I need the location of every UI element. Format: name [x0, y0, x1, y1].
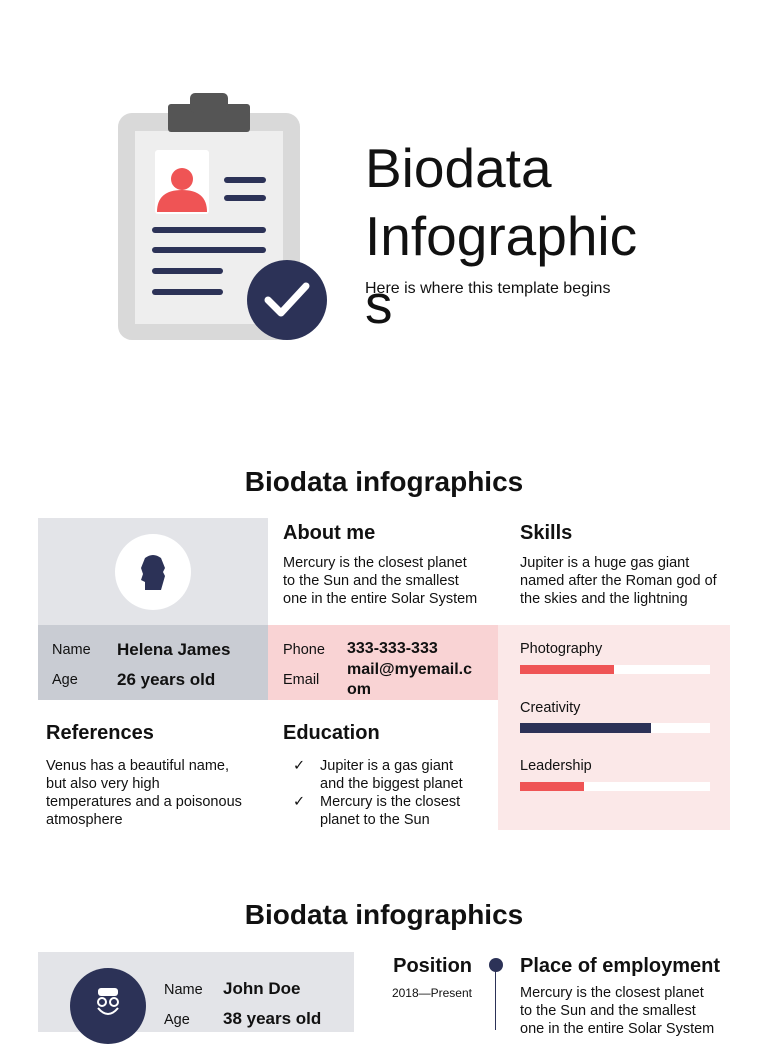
panel: contact: mail@myemail.c	[347, 661, 472, 678]
panel: contact	[268, 625, 498, 700]
heading: section 1: Biodata infographics	[245, 466, 523, 497]
title: Biodata	[365, 137, 552, 199]
panel: contact: om	[347, 681, 371, 698]
title: s	[365, 273, 392, 335]
timeline: Mercury is the closest planet	[520, 985, 704, 1001]
panel: skills text: the skies and the lightning	[520, 591, 688, 607]
timeline: Place of employment	[520, 955, 720, 977]
title	[365, 137, 637, 335]
panel: education: and the biggest planet	[320, 776, 463, 792]
panel: references: temperatures and a poisonous	[46, 794, 242, 810]
panel: profile 2: Name	[164, 982, 203, 998]
panel: name/age: Age	[52, 672, 78, 688]
icon: person avatar	[115, 534, 191, 610]
panel: name/age	[38, 625, 268, 700]
panel: about me: About me	[283, 522, 375, 544]
panel: photo	[38, 518, 268, 625]
timeline: 2018—Present	[392, 986, 472, 1000]
panel: profile 2: 38 years old	[223, 1009, 321, 1028]
subtitle: Here is where this template begins	[365, 280, 610, 297]
panel: education: planet to the Sun	[320, 812, 430, 828]
panel: profile 2: John Doe	[223, 979, 300, 998]
panel: education: ✓	[293, 794, 305, 810]
timeline	[392, 955, 720, 1037]
panel: skills text: Jupiter is a huge gas giant	[520, 555, 689, 571]
panel: references: but also very high	[46, 776, 160, 792]
heading: section 2: Biodata infographics	[245, 899, 523, 930]
panel: about me: one in the entire Solar System	[283, 591, 477, 607]
panel: skill bars	[498, 625, 730, 830]
panel: references: atmosphere	[46, 812, 123, 828]
panel: education: Mercury is the closest	[320, 794, 460, 810]
panel: references: Venus has a beautiful name,	[46, 758, 229, 774]
icon: man avatar	[70, 968, 146, 1044]
panel: skills text: Skills	[520, 522, 572, 544]
panel: education: ✓	[293, 758, 305, 774]
panel: education: Education	[283, 722, 380, 744]
panel: name/age: Helena James	[117, 640, 230, 659]
text: one in the entire Solar System	[520, 1021, 714, 1037]
panel: about me	[283, 522, 477, 607]
text: Leadership	[520, 758, 592, 774]
panel: references	[46, 722, 242, 828]
panel: skills text: named after the Roman god of	[520, 573, 717, 589]
panel: about me: to the Sun and the smallest	[283, 573, 459, 589]
panel: name/age: 26 years old	[117, 670, 215, 689]
text: Creativity	[520, 700, 580, 716]
panel: skills text	[520, 522, 717, 607]
panel: references: References	[46, 722, 154, 744]
icon: clipboard	[118, 93, 327, 340]
panel: education	[283, 722, 463, 828]
title: Infographic	[365, 205, 637, 267]
timeline: Position	[393, 955, 472, 977]
panel: education: Jupiter is a gas giant	[320, 758, 453, 774]
timeline: to the Sun and the smallest	[520, 1003, 696, 1019]
panel: name/age: Name	[52, 642, 91, 658]
panel: about me: Mercury is the closest planet	[283, 555, 467, 571]
panel: contact: Phone	[283, 642, 325, 658]
panel: contact: Email	[283, 672, 319, 688]
panel: contact: 333-333-333	[347, 640, 438, 657]
text: Photography	[520, 641, 602, 657]
panel: profile 2: Age	[164, 1012, 190, 1028]
panel: profile 2	[38, 952, 354, 1032]
